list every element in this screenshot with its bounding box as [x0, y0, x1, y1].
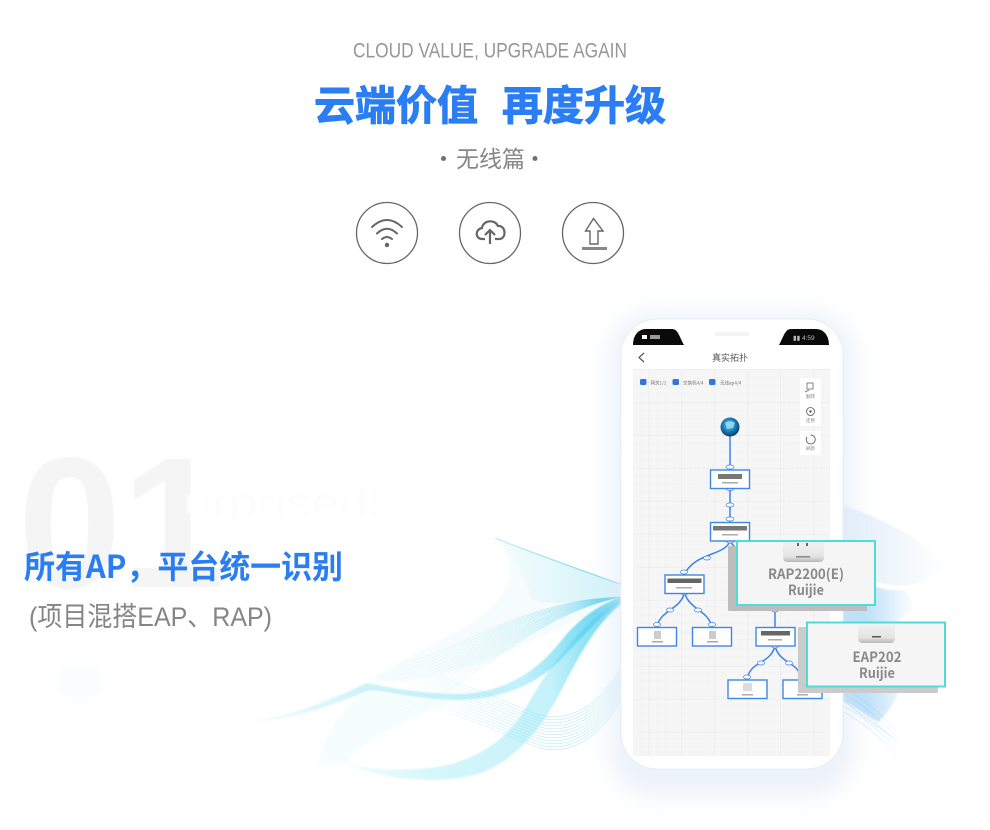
- node: right switch: [756, 628, 795, 646]
- icon: upgrade arrow: [562, 202, 624, 264]
- callout: RAP2200(E): Ruijie: [788, 580, 824, 600]
- phone side buttons: [618, 415, 846, 478]
- faint smudge: [56, 664, 104, 700]
- background numeral 01: 01: [18, 420, 225, 627]
- callout shadow: [728, 546, 867, 611]
- node: AP two: [692, 628, 732, 646]
- callout card: [737, 541, 875, 605]
- callout: EAP202: [798, 622, 945, 693]
- link nodes: [654, 465, 806, 679]
- topology legend: 无线ap4/4: [720, 380, 742, 386]
- icon: internet globe: [720, 418, 740, 436]
- panel: phone mockup: [610, 312, 854, 796]
- toolbar: 刷新: [806, 445, 815, 452]
- node: AP four: [783, 680, 822, 698]
- wave ribbons, right of phone: [843, 505, 945, 759]
- section sub text: (项目混搭EAP、RAP): [29, 602, 272, 632]
- status bar left: [633, 329, 684, 345]
- screen header: [633, 346, 829, 370]
- callout: RAP2200(E): [728, 541, 875, 611]
- topology canvas: [633, 369, 830, 756]
- phone earpiece: [715, 332, 749, 336]
- callout shadow: [798, 627, 938, 693]
- toolbar: [800, 378, 821, 455]
- node: AP three: [728, 680, 767, 698]
- subtitle: wireless: 无线篇: [456, 140, 525, 174]
- node: left switch: [665, 575, 704, 594]
- title: main Chinese heading: 云端价值: [314, 72, 478, 132]
- icon: cloud upload: [460, 202, 520, 264]
- callout: EAP202: EAP202: [852, 647, 902, 667]
- node: gateway: [710, 470, 750, 488]
- faint background band: [0, 256, 990, 296]
- callout: RAP2200(E): RAP2200(E): [768, 564, 844, 584]
- icon: EAP202 device: [858, 624, 895, 643]
- faint background word: urprised!: [184, 481, 382, 525]
- topology links: [657, 436, 802, 680]
- topology legend: 网关1/1: [650, 380, 667, 386]
- icon: wifi: [356, 202, 418, 264]
- node: AP one: [638, 628, 676, 646]
- status bar right: ▮▮ 4:59: [793, 335, 815, 342]
- topology legend: 交换机4/4: [683, 380, 704, 386]
- title: English tagline: CLOUD VALUE, UPGRADE AGAIN: [353, 40, 627, 62]
- node: core switch: [710, 522, 750, 541]
- phone body: [621, 319, 843, 769]
- section heading: 所有AP，平台统一识别: [24, 542, 343, 588]
- wave ribbons, left of phone: [233, 538, 634, 780]
- title: main Chinese heading: 再度升级: [502, 72, 666, 132]
- screen header: 真实拓扑: [712, 351, 748, 364]
- toolbar: 还原: [806, 417, 815, 424]
- title: main Chinese heading: [314, 72, 666, 132]
- phone glow: [610, 312, 854, 796]
- callout: EAP202: Ruijie: [859, 663, 895, 683]
- topology legend: [640, 379, 742, 386]
- icon: RAP2200 device: [783, 542, 824, 562]
- callout card: [807, 622, 945, 686]
- toolbar: 翻转: [806, 393, 815, 400]
- status bar right: [779, 329, 829, 345]
